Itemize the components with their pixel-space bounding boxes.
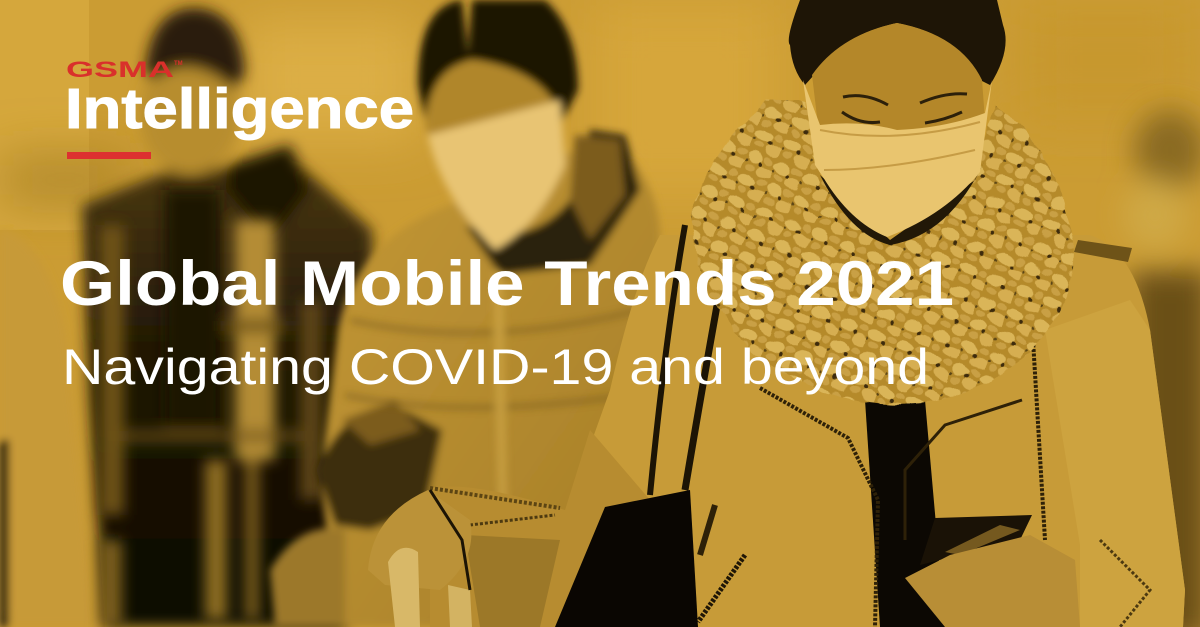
far left blurred shoulder — [0, 228, 95, 627]
title: Global Mobile Trends 2021 — [60, 249, 954, 319]
logo — [65, 57, 414, 159]
right person — [368, 0, 1185, 627]
knitted scarf — [691, 100, 1075, 404]
bag — [555, 490, 698, 627]
logo: GSMA wordmark: GSMA — [66, 57, 174, 82]
left blurred person — [82, 8, 375, 627]
subtitle: Navigating COVID-19 and beyond — [62, 339, 929, 395]
background figure on the right — [1123, 110, 1200, 627]
shoulder bag straps — [650, 225, 685, 495]
right hand and phone — [905, 515, 1080, 627]
zips and lapels — [698, 240, 1150, 627]
face mask — [803, 80, 992, 237]
face — [812, 23, 985, 132]
left hand on suitcase handle — [368, 490, 472, 627]
logo: trademark: TM — [174, 61, 183, 67]
hair — [789, 0, 1006, 85]
eyebrows and eyes — [842, 94, 967, 123]
shirt — [865, 400, 945, 627]
neck shadow — [820, 160, 985, 245]
logo: Intelligence wordmark: Intelligence — [65, 77, 414, 141]
jacket — [430, 235, 1185, 627]
logo: red underline — [67, 152, 151, 159]
middle person — [270, 0, 660, 627]
